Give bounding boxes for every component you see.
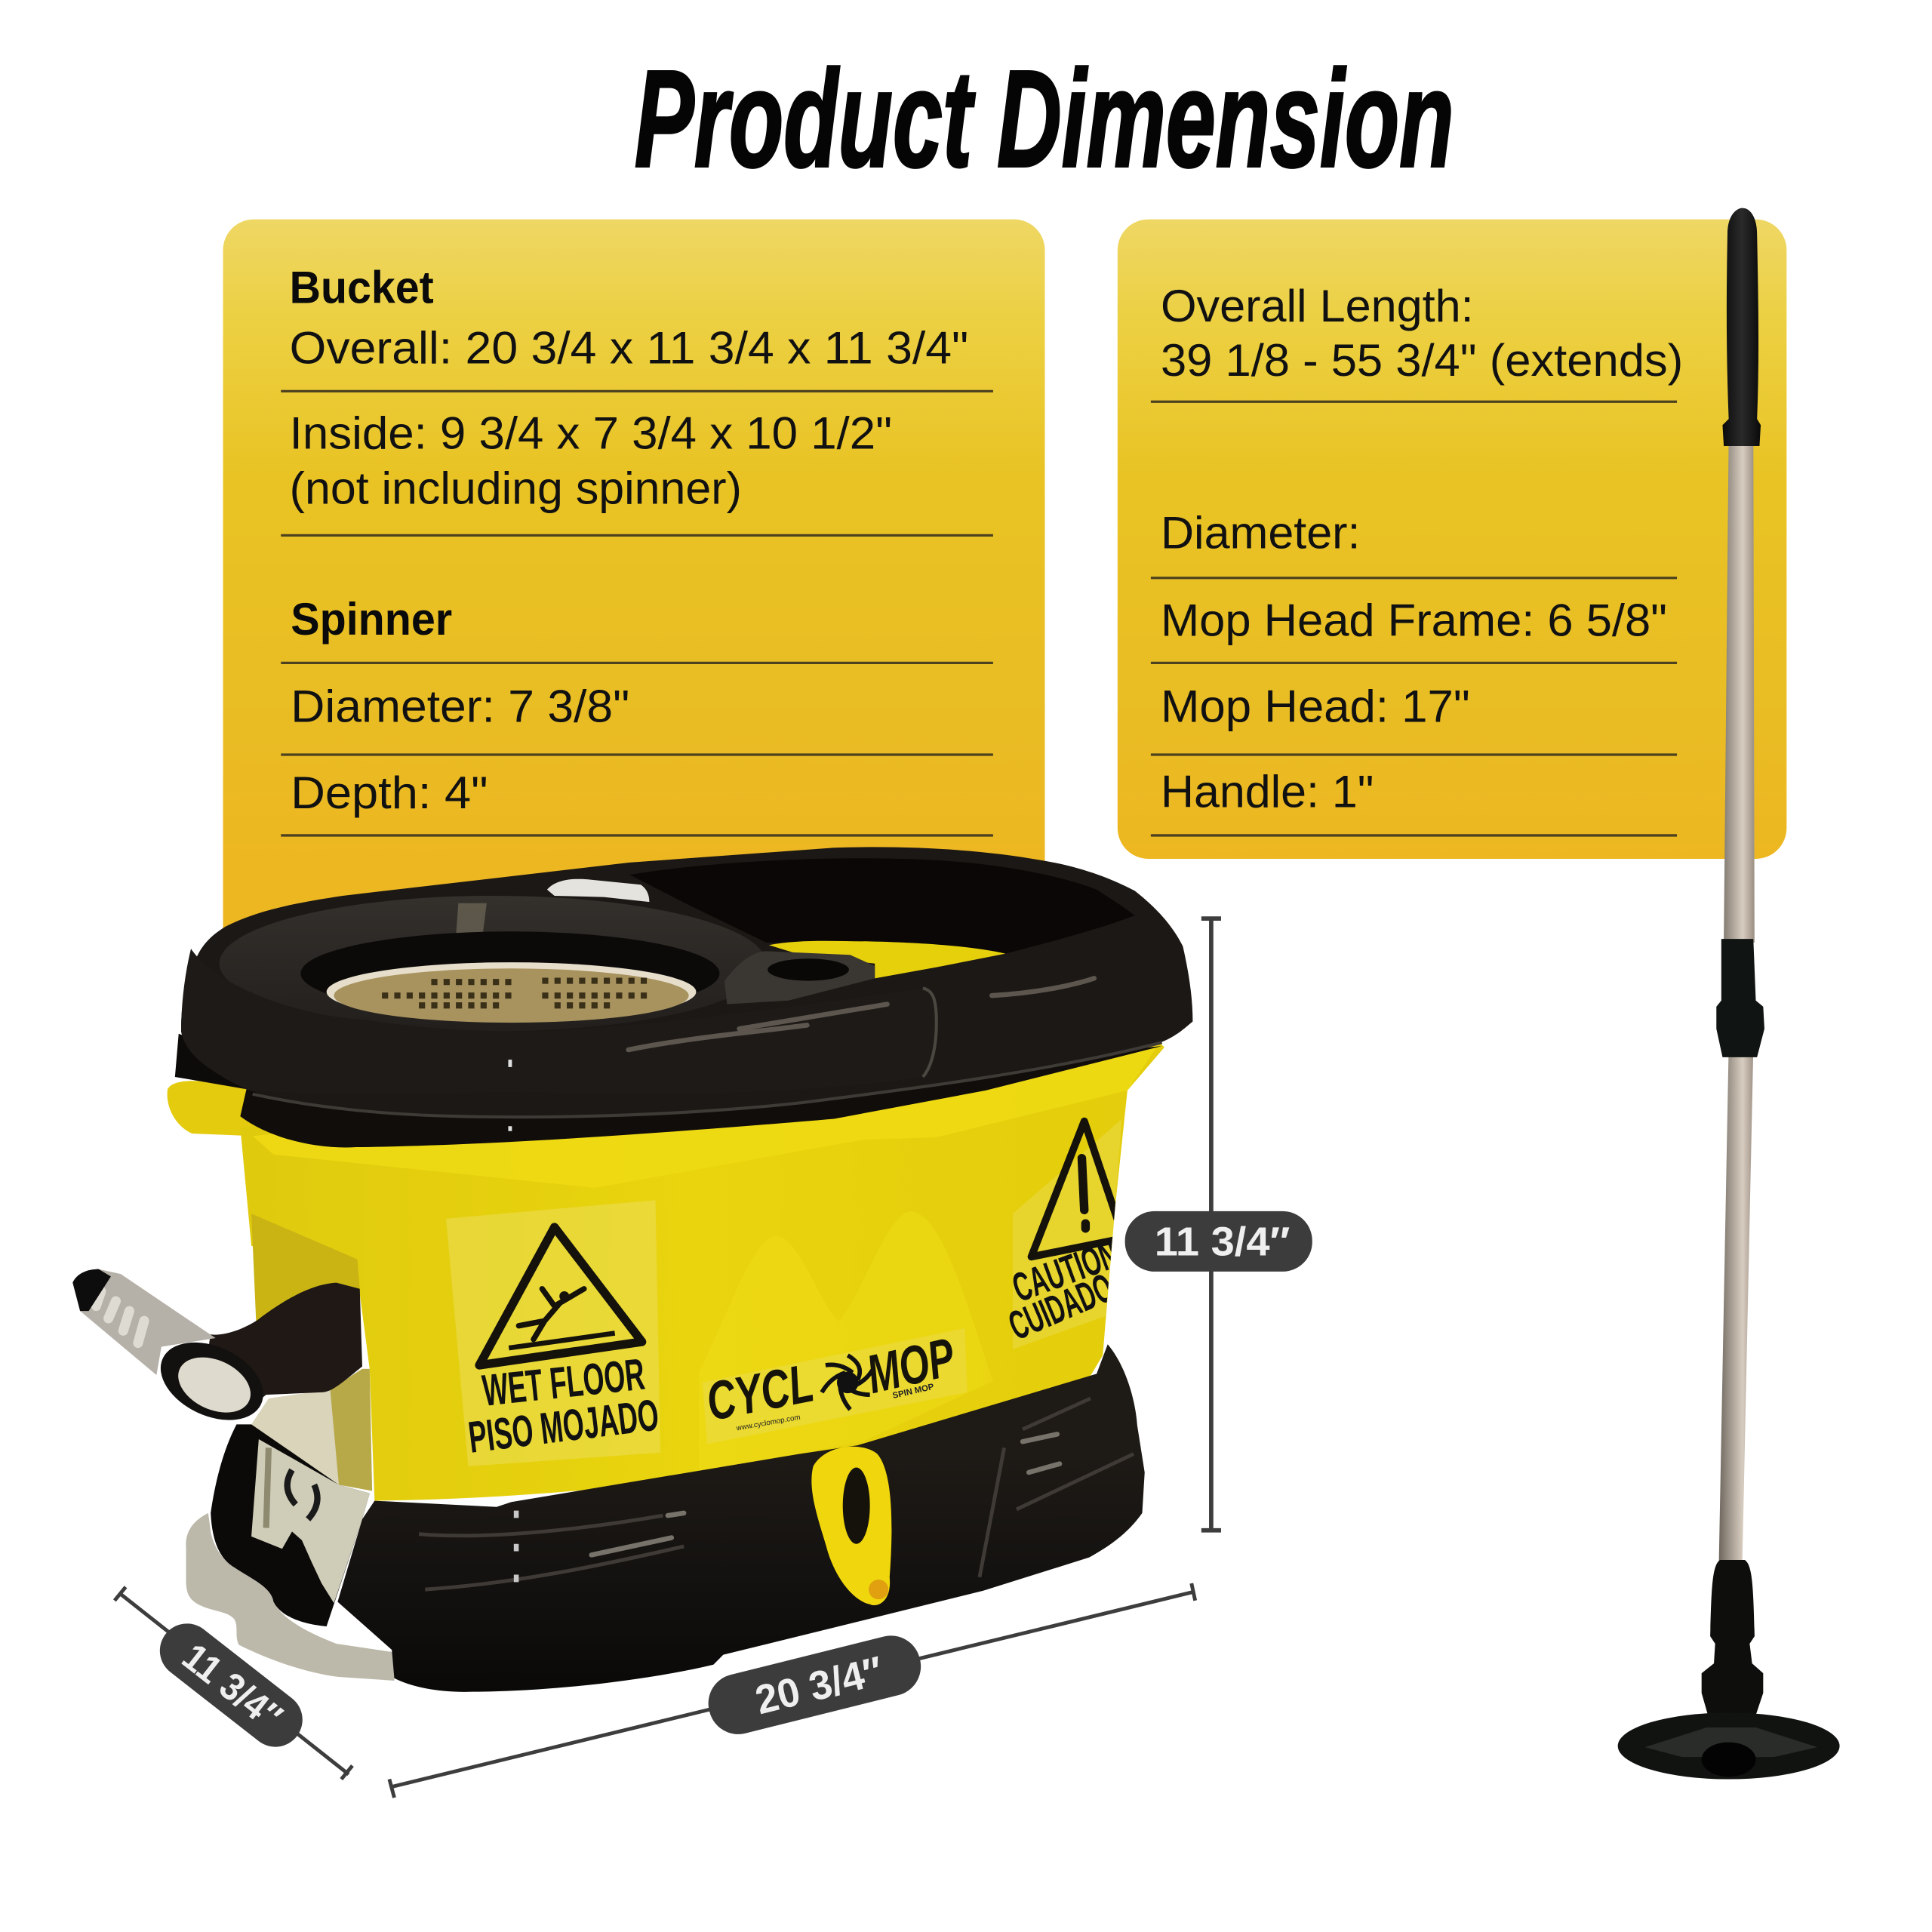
text: inside bucket size: Inside: 9 3/4 x 7 3/4 x 10 1/2" [290, 407, 892, 458]
mop pole illustration [1618, 208, 1840, 1780]
plug slot [843, 1467, 870, 1544]
text: cycl: CYCL [702, 1353, 819, 1432]
text: mop head: Mop Head: 17" [1161, 681, 1470, 732]
left recess [251, 1214, 360, 1326]
sticker backing [446, 1200, 660, 1466]
bucket illustration [72, 847, 1192, 1692]
title: Product Dimension [635, 41, 1454, 195]
yellow interior [769, 941, 1005, 978]
slipping figure [509, 1289, 615, 1348]
basket interior [334, 968, 689, 1023]
base shine [592, 1434, 1060, 1555]
length label: 20 3/4″ [751, 1648, 888, 1723]
grip end cap [72, 1269, 111, 1311]
text: diameter label: Diameter: [1161, 507, 1360, 558]
text: overall length value: 39 1/8 - 55 3/4" (extends) [1161, 334, 1683, 386]
text: wet floor: WET FLOOR [480, 1350, 647, 1416]
knob face [169, 1346, 260, 1423]
plug body [811, 1447, 891, 1605]
cup hole [768, 958, 849, 981]
metal bracket upper [251, 1369, 372, 1491]
rim glare [629, 978, 1094, 1050]
text: website: www.cyclomop.com [735, 1414, 801, 1433]
text: piso mojado: PISO MOJADO [466, 1390, 661, 1463]
moulded arches [699, 1211, 993, 1472]
bracket slot [266, 1447, 269, 1527]
text: caution: CAUTION [1007, 1231, 1124, 1311]
figure limbs [518, 1289, 584, 1340]
logo backing [703, 1328, 968, 1444]
height line [1201, 918, 1221, 1531]
mop head disc [1618, 1712, 1840, 1780]
bracket shaded side [331, 1369, 372, 1491]
height pill [1125, 1211, 1312, 1272]
handle outline [923, 988, 937, 1077]
length line [389, 1583, 1195, 1798]
pedal knob [148, 1327, 275, 1435]
rim shine dots [509, 1060, 511, 1131]
heading: Bucket: Bucket [290, 262, 434, 313]
metal bracket lower [251, 1439, 370, 1603]
pedal lever [208, 1283, 362, 1418]
text: mop head frame: Mop Head Frame: 6 5/8" [1161, 594, 1667, 645]
swirl icon [822, 1355, 872, 1410]
disc highlight [1645, 1727, 1817, 1757]
front rim handle [181, 949, 937, 1094]
spinner ring [220, 896, 767, 1032]
trough inner [629, 858, 1135, 954]
depth dimension [115, 1587, 352, 1780]
base ridges [419, 1398, 1134, 1589]
cup holder tab [724, 951, 875, 1004]
text: handle: Handle: 1" [1161, 765, 1374, 817]
height label: 11 3/4″ [1155, 1220, 1290, 1265]
panel: mop dimensions [1118, 220, 1786, 859]
rim seam [253, 1042, 1162, 1117]
steel basket [327, 962, 696, 1021]
exclamation mark [1081, 1158, 1085, 1229]
text: overall bucket size: Overall: 20 3/4 x 11 3/4 x 11 3/4" [290, 322, 968, 374]
text: spinner depth: Depth: 4" [291, 767, 488, 818]
grip bumps [96, 1291, 144, 1343]
upper steel tube [1724, 438, 1755, 943]
lower rim band [240, 1046, 1162, 1147]
text: spin mop: SPIN MOP [892, 1383, 935, 1401]
base screw dots [515, 1511, 518, 1582]
depth line [115, 1587, 352, 1780]
foot plate [186, 1513, 394, 1681]
drain plug [811, 1447, 891, 1605]
ring glare [456, 903, 487, 937]
text: spinner note: (not including spinner) [290, 463, 742, 514]
pedal grip [72, 1269, 216, 1375]
mop head connector [1702, 1560, 1763, 1719]
caution triangle [1032, 1121, 1124, 1257]
depth label: 11 3/4″ [174, 1635, 291, 1739]
text: mop: MOP [862, 1327, 961, 1405]
brand logo [702, 1327, 968, 1444]
panel background: mop [1118, 220, 1786, 859]
rim [181, 847, 1192, 1118]
left tab [168, 1081, 290, 1136]
black base [337, 1344, 1145, 1692]
text: spinner diameter: Diameter: 7 3/8" [291, 681, 629, 732]
bracket marks [288, 1470, 318, 1519]
black handle grip [1722, 208, 1761, 446]
spinner well [300, 931, 719, 1015]
panel background: bucket [223, 220, 1044, 949]
sticker: caution [1010, 1117, 1121, 1349]
yellow body [240, 1035, 1164, 1501]
depth pill [149, 1613, 313, 1758]
warning triangle [479, 1227, 642, 1365]
length pill [702, 1629, 927, 1740]
sticker backing [1013, 1119, 1121, 1349]
extension collar [1716, 939, 1764, 1057]
figure head [559, 1291, 569, 1301]
length dimension [389, 1583, 1195, 1798]
disc centre [1702, 1743, 1756, 1777]
heading: Spinner: Spinner [291, 593, 452, 645]
plate inner black [211, 1424, 370, 1626]
height dimension [1125, 918, 1312, 1531]
text: overall length label: Overall Length: [1161, 280, 1474, 331]
text: cuidado: CUIDADO [1002, 1265, 1120, 1349]
upper band highlight [253, 1044, 1158, 1188]
left notch [175, 1034, 247, 1089]
basket perforations [382, 981, 653, 1005]
pedal button [547, 879, 649, 902]
lower steel tube [1719, 1048, 1753, 1564]
plug spout [869, 1580, 888, 1599]
panel: bucket and spinner dimensions [223, 220, 1044, 949]
sticker: wet floor [446, 1200, 661, 1466]
floor line [509, 1334, 615, 1348]
